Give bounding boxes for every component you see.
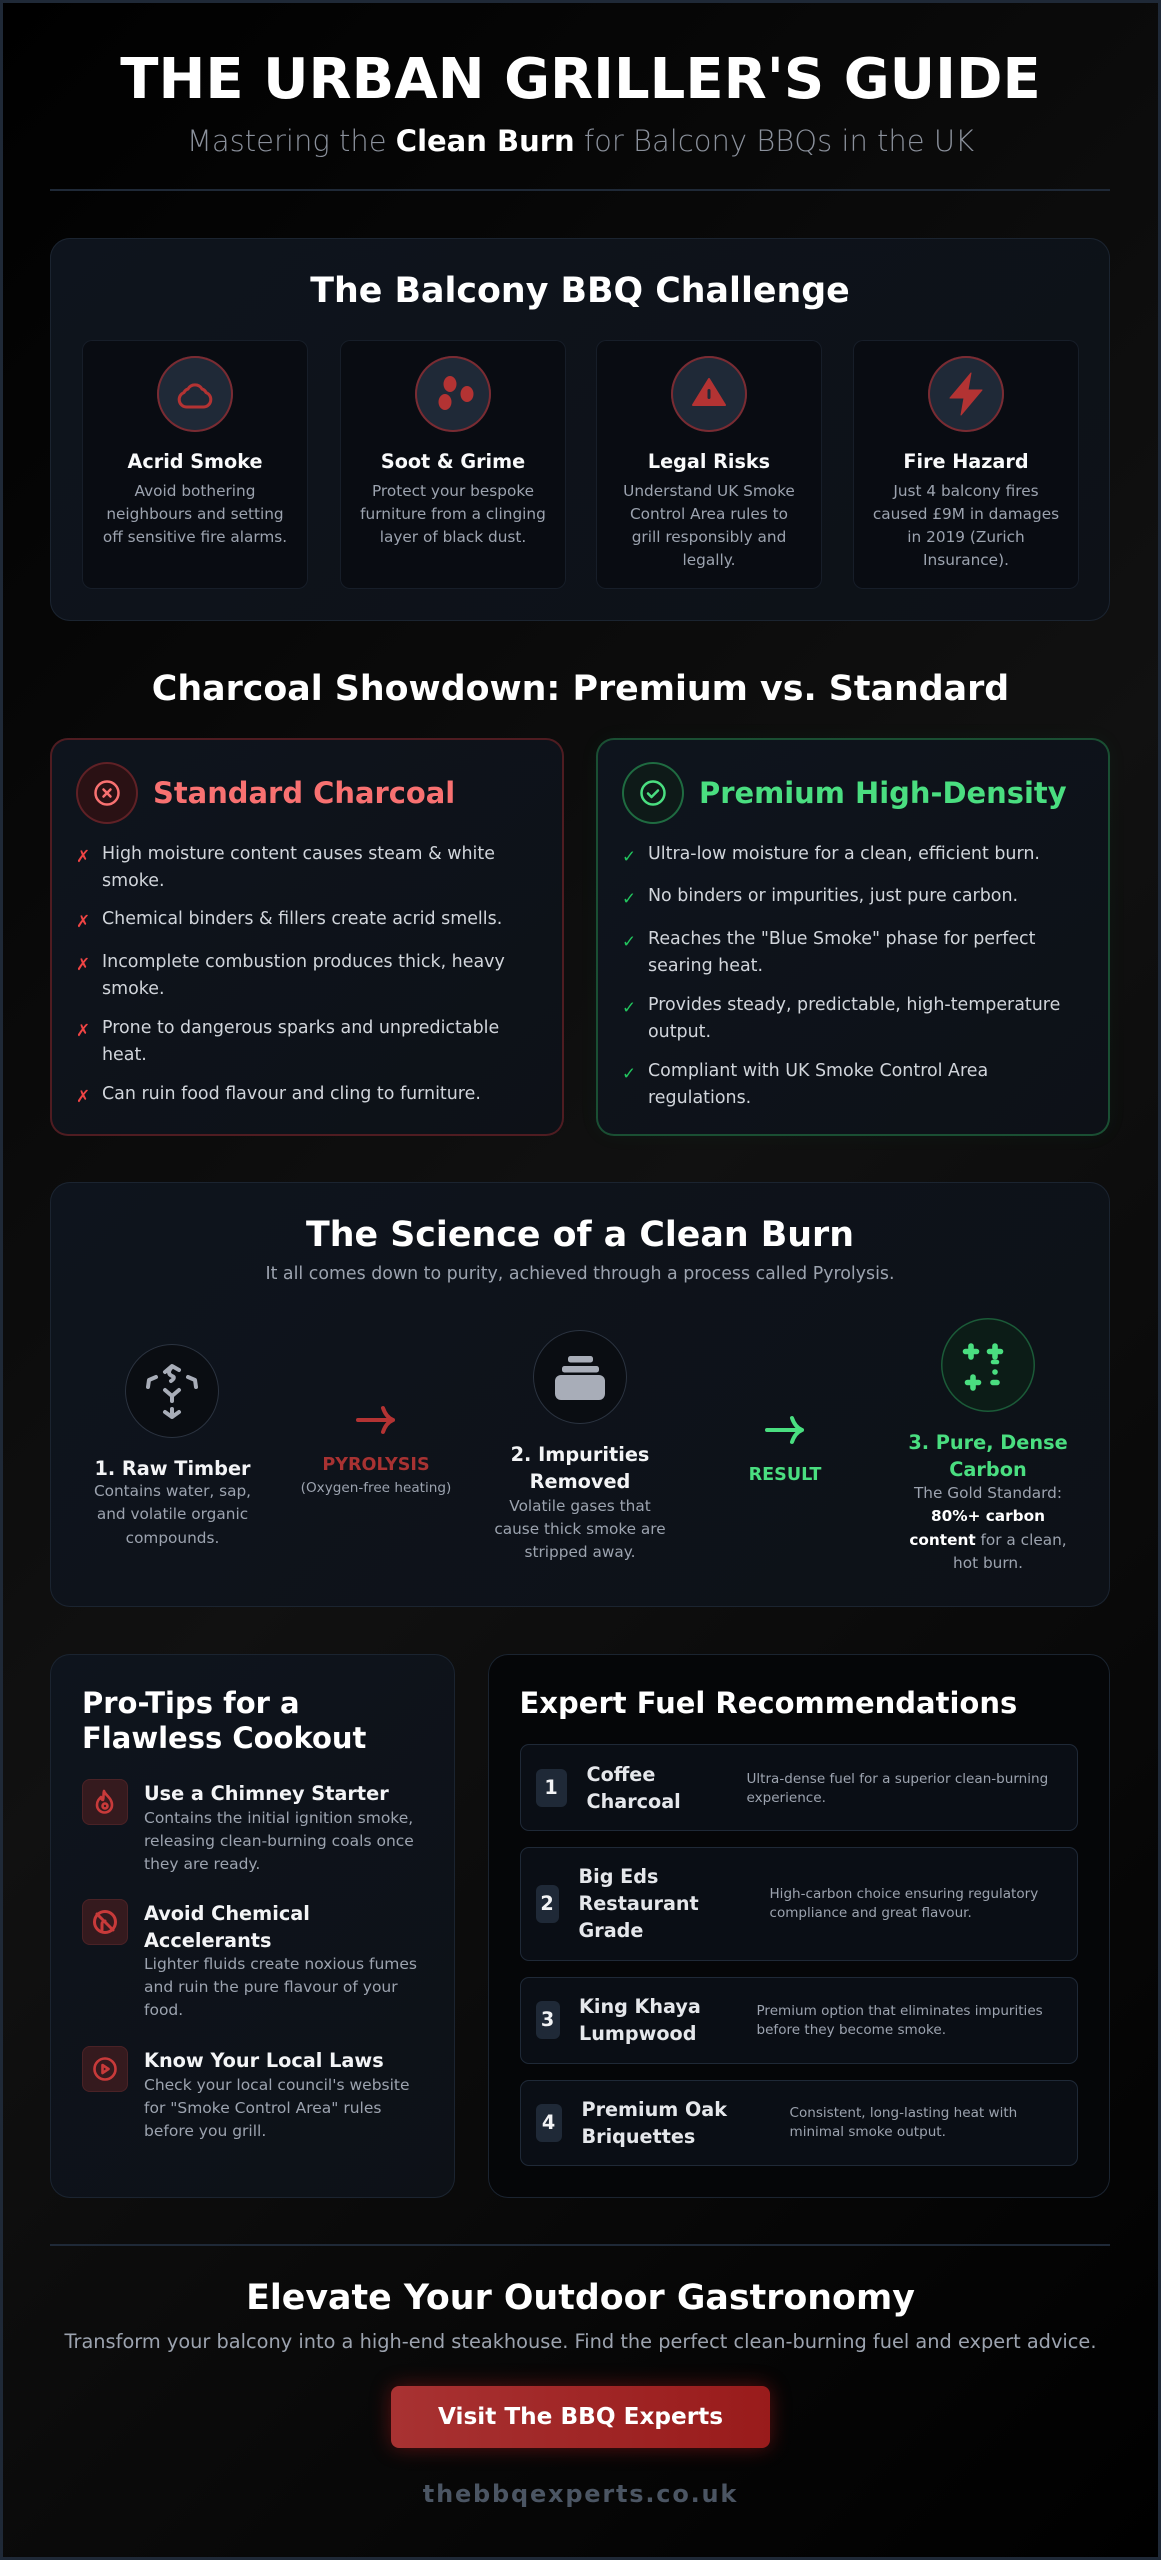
- fuel name: Charcoal: [586, 1790, 681, 1812]
- icon: flame: [82, 1779, 128, 1825]
- step 2: impurities removed: [494, 1330, 666, 1561]
- list: premium benefits: searing heat.: [648, 956, 763, 976]
- rank badge: 2: [540, 1892, 554, 1915]
- card: acrid smoke: [82, 340, 308, 589]
- rank badge: 3: [541, 2008, 554, 2031]
- panel: science of a clean burn: [50, 1182, 1110, 1607]
- step text: Contains water, sap,: [94, 1482, 251, 1500]
- header: [120, 47, 1041, 158]
- heading: science: The Science of a Clean Burn: [306, 1215, 854, 1255]
- step text: cause thick smoke are: [494, 1520, 666, 1538]
- list: standard drawbacks: smoke.: [102, 979, 164, 999]
- list: standard drawbacks: ✗: [76, 1086, 90, 1106]
- icon: stack: [533, 1330, 627, 1424]
- heading: charcoal showdown: Charcoal Showdown: Premium vs. Standard: [152, 669, 1009, 709]
- fuel description: before they become smoke.: [756, 2022, 946, 2038]
- icon: cloud: [157, 356, 233, 432]
- step text: [494, 1496, 666, 1561]
- tip title: Accelerants: [144, 1928, 271, 1952]
- step text: compounds.: [126, 1529, 219, 1547]
- list: standard drawbacks: heat.: [102, 1045, 147, 1065]
- card: legal risks: [596, 340, 822, 589]
- card title: Soot & Grime: [381, 450, 525, 473]
- tip text: Check your local council's website: [144, 2076, 410, 2094]
- tip: chemical accelerants: [82, 1899, 417, 2019]
- fuel description: Premium option that eliminates impurities: [756, 2002, 1043, 2018]
- list: standard drawbacks: Prone to dangerous sparks and unpredictable: [102, 1018, 499, 1038]
- fuel description: [770, 1886, 1038, 1921]
- card text: Avoid bothering: [135, 482, 255, 500]
- card text: [873, 482, 1059, 569]
- fuel name: Briquettes: [582, 2124, 695, 2148]
- heading: Standard Charcoal: [153, 776, 455, 810]
- card text: Control Area rules to: [630, 505, 788, 523]
- card text: [360, 482, 546, 546]
- card text: off sensitive fire alarms.: [103, 528, 287, 546]
- icon: lightning bolt: [928, 356, 1004, 432]
- list: premium benefits: ✓: [622, 1063, 636, 1083]
- card text: in 2019 (Zurich: [907, 528, 1025, 546]
- fuel name: [579, 1994, 701, 2044]
- button: [391, 2386, 770, 2448]
- icon: carbon: [941, 1318, 1035, 1412]
- tip text: food.: [144, 2001, 183, 2019]
- list: standard drawbacks: Can ruin food flavour and cling to furniture.: [102, 1084, 481, 1104]
- arrow: result: [749, 1416, 822, 1485]
- fuel description: compliance and great flavour.: [770, 1905, 972, 1921]
- step text: The Gold Standard:: [914, 1484, 1062, 1502]
- tip text: [144, 2076, 410, 2140]
- fuel name: [578, 1865, 699, 1942]
- step title: [908, 1430, 1068, 1480]
- icon: soot particles: [415, 356, 491, 432]
- list: premium benefits: Compliant with UK Smoke Control Area: [648, 1061, 988, 1081]
- tip text: [144, 1808, 414, 1873]
- fuel description: [790, 2105, 1017, 2140]
- heading: challenge: The Balcony BBQ Challenge: [310, 271, 850, 311]
- item: big eds: [520, 1847, 1078, 1961]
- step text: 80%+ carbon: [931, 1507, 1045, 1525]
- card text: [623, 482, 795, 569]
- fuel name: Big Eds: [578, 1865, 658, 1888]
- footer call to action: [64, 2278, 1096, 2508]
- fuel description: minimal smoke output.: [790, 2124, 946, 2140]
- list: standard drawbacks: ✗: [76, 911, 90, 931]
- step title: Removed: [530, 1470, 630, 1492]
- icon: check circle: [622, 762, 684, 824]
- card text: caused £9M in damages: [873, 505, 1059, 523]
- fuel name: [586, 1762, 681, 1812]
- subtitle: Mastering the Clean Burn for Balcony BBQs in the UK: [187, 124, 974, 158]
- panel: pro-tips: [50, 1654, 455, 2198]
- tip: chimney starter: [82, 1779, 414, 1873]
- fuel name: Grade: [578, 1919, 643, 1942]
- item: king khaya: [520, 1977, 1078, 2064]
- list: premium benefits: ✓: [622, 931, 636, 951]
- list: standard drawbacks: Chemical binders & fillers create acrid smells.: [102, 909, 502, 929]
- icon: timber: [125, 1344, 219, 1438]
- list: premium benefits: output.: [648, 1022, 711, 1042]
- card title: Legal Risks: [648, 450, 770, 473]
- card: soot and grime: [340, 340, 566, 589]
- list: premium benefits: ✓: [622, 997, 636, 1017]
- fuel description: [756, 2002, 1043, 2038]
- tip text: and ruin the pure flavour of your: [144, 1978, 398, 1996]
- fuel name: Lumpwood: [579, 2022, 696, 2044]
- list: standard drawbacks: [76, 844, 505, 1106]
- card text: furniture from a clinging: [360, 505, 546, 523]
- tip: local laws: [82, 2046, 410, 2140]
- heading: pro-tips: [82, 1686, 366, 1755]
- heading: fuel: Expert Fuel Recommendations: [520, 1686, 1017, 1720]
- step text: hot burn.: [953, 1554, 1023, 1572]
- arrow: pyrolysis: [301, 1406, 451, 1496]
- card text: [103, 482, 287, 546]
- rank badge: 4: [542, 2111, 555, 2134]
- subheading: It all comes down to purity, achieved through a process called Pyrolysis.: [265, 1264, 895, 1284]
- tip text: Contains the initial ignition smoke,: [144, 1808, 413, 1826]
- panel: standard charcoal: [50, 738, 564, 1136]
- step 3: pure dense carbon: [908, 1318, 1068, 1572]
- list: premium benefits: [622, 844, 1060, 1108]
- rank badge: 1: [544, 1776, 558, 1799]
- note: (Oxygen-free heating): [301, 1480, 451, 1496]
- tip title: Use a Chimney Starter: [144, 1782, 389, 1804]
- card title: Fire Hazard: [903, 450, 1029, 473]
- icon: cross circle: [76, 762, 138, 824]
- label: RESULT: [749, 1465, 821, 1485]
- panel: premium high-density: [596, 738, 1110, 1136]
- title: THE URBAN GRILLER'S GUIDE: [120, 47, 1041, 112]
- arrow icon: [356, 1406, 396, 1434]
- website: thebbqexperts.co.uk: [423, 2480, 738, 2508]
- list: premium benefits: Provides steady, predictable, high-temperature: [648, 995, 1060, 1015]
- icon: no flame: [82, 1899, 128, 1945]
- arrow icon: [765, 1416, 804, 1444]
- list: standard drawbacks: ✗: [76, 954, 90, 974]
- fuel description: Consistent, long-lasting heat with: [790, 2105, 1017, 2121]
- tip text: for "Smoke Control Area" rules: [144, 2099, 381, 2117]
- step text: Volatile gases that: [509, 1496, 651, 1514]
- button: Visit The BBQ Experts: [438, 2403, 723, 2430]
- card text: legally.: [682, 551, 735, 569]
- heading: pro-tips: Flawless Cookout: [82, 1721, 366, 1755]
- tip text: [144, 1954, 417, 2019]
- step title: Carbon: [949, 1458, 1027, 1480]
- tip title: [144, 1902, 310, 1952]
- tip text: they are ready.: [144, 1855, 260, 1873]
- tip title: Know Your Local Laws: [144, 2048, 384, 2072]
- step title: 1. Raw Timber: [94, 1456, 251, 1480]
- fuel name: Restaurant: [578, 1892, 699, 1915]
- step text: and volatile organic: [97, 1505, 248, 1523]
- list: premium benefits: Reaches the "Blue Smoke" phase for perfect: [648, 929, 1035, 949]
- list: premium benefits: regulations.: [648, 1088, 751, 1108]
- list: premium benefits: Ultra-low moisture for a clean, efficient burn.: [648, 844, 1040, 864]
- footer text: Transform your balcony into a high-end steakhouse. Find the perfect clean-burning fuel and expert advice.: [65, 2330, 1096, 2353]
- step 1: raw timber: [94, 1344, 251, 1547]
- card text: layer of black dust.: [380, 528, 526, 546]
- card title: Acrid Smoke: [128, 450, 262, 473]
- list: standard drawbacks: ✗: [76, 846, 90, 866]
- fuel name: Premium Oak: [582, 2098, 727, 2120]
- step title: 3. Pure, Dense: [908, 1430, 1068, 1454]
- card text: Understand UK Smoke: [623, 482, 795, 500]
- card text: Insurance).: [923, 551, 1009, 569]
- item: premium oak: [520, 2080, 1078, 2166]
- card text: Just 4 balcony fires: [893, 482, 1039, 500]
- label: PYROLYSIS: [322, 1455, 430, 1475]
- rank badge: [536, 1769, 566, 1807]
- step text: content for a clean,: [909, 1531, 1067, 1549]
- tip text: releasing clean-burning coals once: [144, 1832, 414, 1850]
- footer heading: Elevate Your Outdoor Gastronomy: [246, 2278, 915, 2318]
- step text: [94, 1482, 251, 1547]
- fuel description: High-carbon choice ensuring regulatory: [770, 1886, 1038, 1902]
- fuel name: King Khaya: [579, 1994, 701, 2018]
- heading: pro-tips: Pro-Tips for a: [82, 1686, 300, 1720]
- list: premium benefits: No binders or impurities, just pure carbon.: [648, 886, 1018, 906]
- step text: [909, 1484, 1067, 1572]
- fuel name: [582, 2098, 728, 2148]
- rank badge: [536, 2001, 560, 2039]
- list: standard drawbacks: smoke.: [102, 871, 164, 891]
- panel: expert fuel recommendations: [488, 1654, 1110, 2198]
- rank badge: [536, 2104, 562, 2142]
- list: standard drawbacks: Incomplete combustion produces thick, heavy: [102, 952, 505, 972]
- list: premium benefits: ✓: [622, 846, 636, 866]
- item: coffee charcoal: [520, 1744, 1078, 1831]
- fuel name: Coffee: [586, 1762, 655, 1786]
- fuel description: [746, 1770, 1048, 1806]
- card text: neighbours and setting: [106, 505, 284, 523]
- list: premium benefits: ✓: [622, 888, 636, 908]
- card text: grill responsibly and: [632, 528, 786, 546]
- card text: Protect your bespoke: [372, 482, 534, 500]
- list: standard drawbacks: ✗: [76, 1020, 90, 1040]
- rank badge: [536, 1885, 558, 1923]
- step title: 2. Impurities: [511, 1442, 649, 1466]
- icon: play circle: [82, 2046, 128, 2092]
- tip title: Avoid Chemical: [144, 1902, 310, 1924]
- heading: Premium High-Density: [699, 776, 1067, 810]
- list: standard drawbacks: High moisture content causes steam & white: [102, 844, 495, 864]
- tip text: before you grill.: [144, 2122, 266, 2140]
- fuel description: experience.: [746, 1790, 826, 1806]
- icon: warning triangle: [671, 356, 747, 432]
- tip text: Lighter fluids create noxious fumes: [144, 1954, 417, 1972]
- step text: stripped away.: [525, 1543, 635, 1561]
- panel: the balcony bbq challenge: [50, 238, 1110, 621]
- fuel description: Ultra-dense fuel for a superior clean-burning: [746, 1770, 1048, 1786]
- step title: [511, 1442, 649, 1492]
- card: fire hazard: [853, 340, 1079, 589]
